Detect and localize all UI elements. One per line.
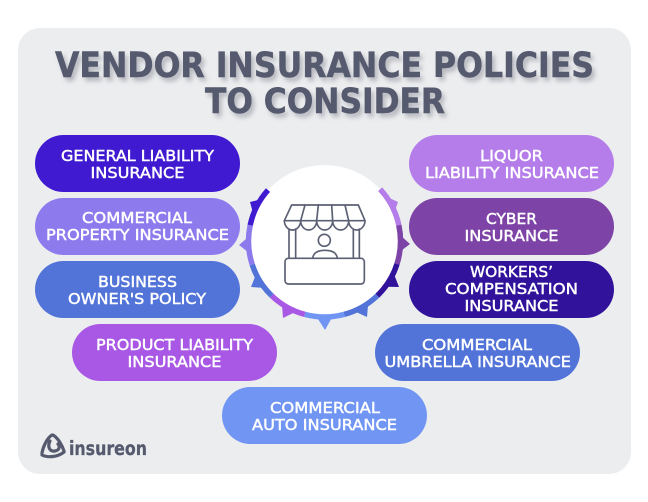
pill: product liability insurance bbox=[72, 324, 277, 381]
pill: general liability insurance: INSURANCE bbox=[90, 164, 184, 182]
logo wordmark: insureon bbox=[69, 437, 147, 460]
pill: general liability insurance bbox=[35, 135, 240, 192]
pill: commercial umbrella insurance: COMMERCIAL bbox=[422, 336, 532, 354]
title: VENDOR INSURANCE POLICIES bbox=[58, 50, 597, 90]
pill: workers' compensation insurance bbox=[409, 261, 614, 318]
segmented ring with ticks bbox=[239, 189, 410, 330]
pill: commercial property insurance: COMMERCIAL bbox=[82, 209, 192, 227]
title: TO CONSIDER bbox=[208, 86, 448, 126]
pill: product liability insurance: PRODUCT LIABILITY bbox=[96, 336, 254, 354]
pill: workers' compensation insurance: COMPENSATION bbox=[445, 280, 578, 298]
pill: general liability insurance: GENERAL LIABILITY bbox=[61, 147, 215, 165]
logo icon bbox=[42, 435, 64, 457]
pill: commercial property insurance: PROPERTY INSURANCE bbox=[46, 226, 229, 244]
pill: business owner's policy: OWNER'S POLICY bbox=[68, 290, 207, 308]
pill: liquor liability insurance: LIQUOR bbox=[480, 147, 543, 165]
title bbox=[55, 46, 597, 126]
logo: insureon bbox=[42, 435, 147, 460]
icon: market stall bbox=[284, 205, 365, 284]
pill: commercial umbrella insurance bbox=[375, 324, 580, 381]
pill: commercial umbrella insurance: UMBRELLA INSURANCE bbox=[384, 353, 571, 371]
pill: commercial auto insurance bbox=[222, 387, 427, 444]
pill: liquor liability insurance: LIABILITY INSURANCE bbox=[425, 164, 599, 182]
central white circle bbox=[248, 165, 400, 317]
pill: liquor liability insurance bbox=[409, 135, 614, 192]
pill: commercial auto insurance: AUTO INSURANCE bbox=[252, 416, 397, 434]
pill: business owner's policy bbox=[35, 261, 240, 318]
pill: business owner's policy: BUSINESS bbox=[98, 273, 177, 291]
pill: product liability insurance: INSURANCE bbox=[128, 353, 222, 371]
pill: workers' compensation insurance: WORKERS’ bbox=[470, 263, 553, 281]
pill: cyber insurance: CYBER bbox=[486, 210, 537, 228]
pill: cyber insurance: INSURANCE bbox=[464, 227, 558, 245]
title: TO CONSIDER bbox=[205, 82, 445, 122]
pill: workers' compensation insurance: INSURANCE bbox=[464, 297, 558, 315]
title: VENDOR INSURANCE POLICIES bbox=[55, 46, 594, 86]
pill: commercial property insurance bbox=[35, 198, 240, 255]
pill: commercial auto insurance: COMMERCIAL bbox=[270, 399, 380, 417]
pill: cyber insurance bbox=[409, 198, 614, 255]
